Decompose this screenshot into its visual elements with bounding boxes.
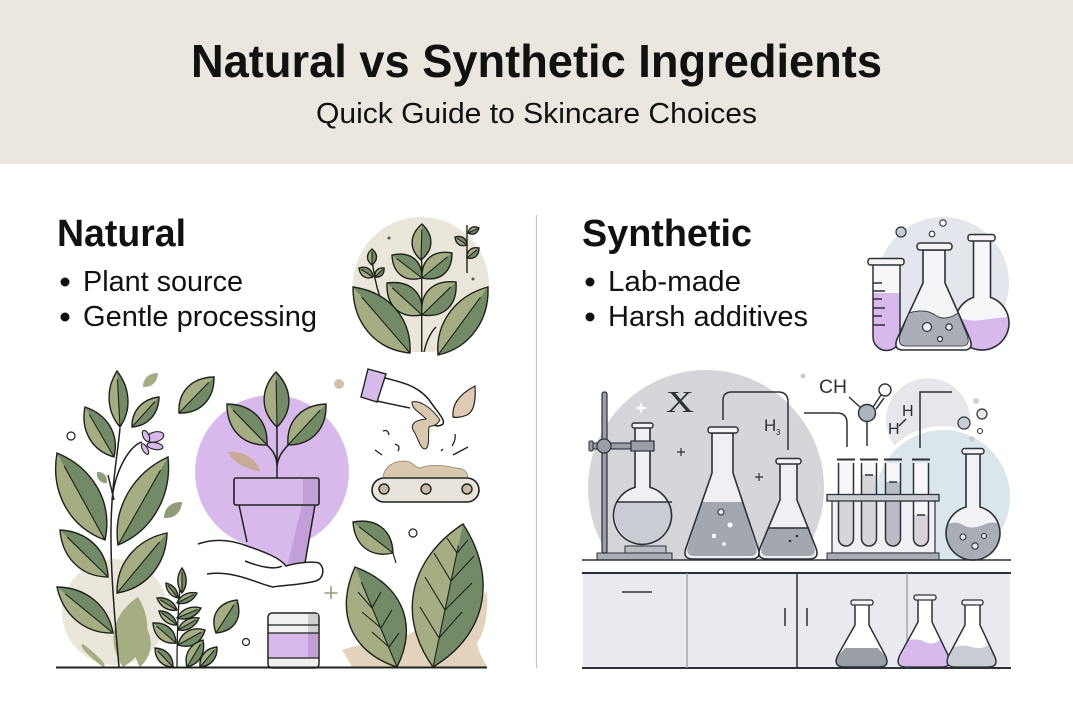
illustration: large veined leaves	[330, 511, 497, 678]
subtitle: Quick Guide to Skincare Choices	[316, 98, 757, 130]
center divider	[536, 215, 538, 668]
icon: glassware group	[868, 217, 1009, 350]
chemical labels and molecule: H	[888, 421, 900, 438]
icon: floating leaf	[171, 369, 222, 421]
natural ground line	[56, 666, 487, 668]
title: Natural vs Synthetic Ingredients	[191, 35, 882, 87]
icon: plant sprig circle	[352, 217, 489, 356]
chemical labels and molecule: CH	[819, 377, 847, 398]
illustration: round flask with bubbles	[946, 398, 1000, 560]
natural bullet list	[60, 266, 317, 333]
decorative dots and plus	[67, 379, 417, 646]
natural bullet list: Gentle processing	[83, 301, 317, 333]
synthetic bullet list: Lab-made	[608, 266, 741, 298]
chemical labels and molecule: H	[902, 403, 914, 420]
illustration: small fern	[148, 568, 222, 671]
chemical labels and molecule: H	[764, 416, 776, 435]
panel: synthetic	[582, 213, 1014, 668]
panel: natural	[41, 213, 501, 678]
chemical labels and molecule	[635, 374, 952, 481]
illustration: three flasks on cabinet	[836, 595, 996, 667]
illustration: test tube rack	[827, 460, 939, 560]
synthetic bullet list: Harsh additives	[608, 301, 808, 333]
illustration: erlenmeyer flasks and tubing	[685, 392, 817, 559]
natural bullet list: Plant source	[83, 266, 243, 298]
icon: jar	[268, 613, 319, 668]
illustration: tall flowering plant	[54, 370, 182, 666]
illustration: potted plant in hand	[195, 372, 349, 587]
illustration: ring stand with round flask	[589, 392, 673, 560]
lab background shapes	[588, 370, 1010, 560]
icon: purple flower	[140, 429, 165, 455]
header band	[0, 0, 1073, 164]
icon: beige leaf	[453, 386, 475, 417]
chemical labels and molecule: X	[666, 384, 694, 419]
heading: synthetic: Synthetic	[582, 213, 752, 255]
heading: natural: Natural	[57, 213, 186, 255]
illustration: hand pouring onto conveyor	[361, 369, 479, 502]
icon: small leaf	[207, 594, 246, 639]
chemical labels and molecule: 3	[776, 428, 781, 437]
lab bench and cabinets	[582, 560, 1011, 668]
synthetic bullet list	[586, 266, 808, 333]
